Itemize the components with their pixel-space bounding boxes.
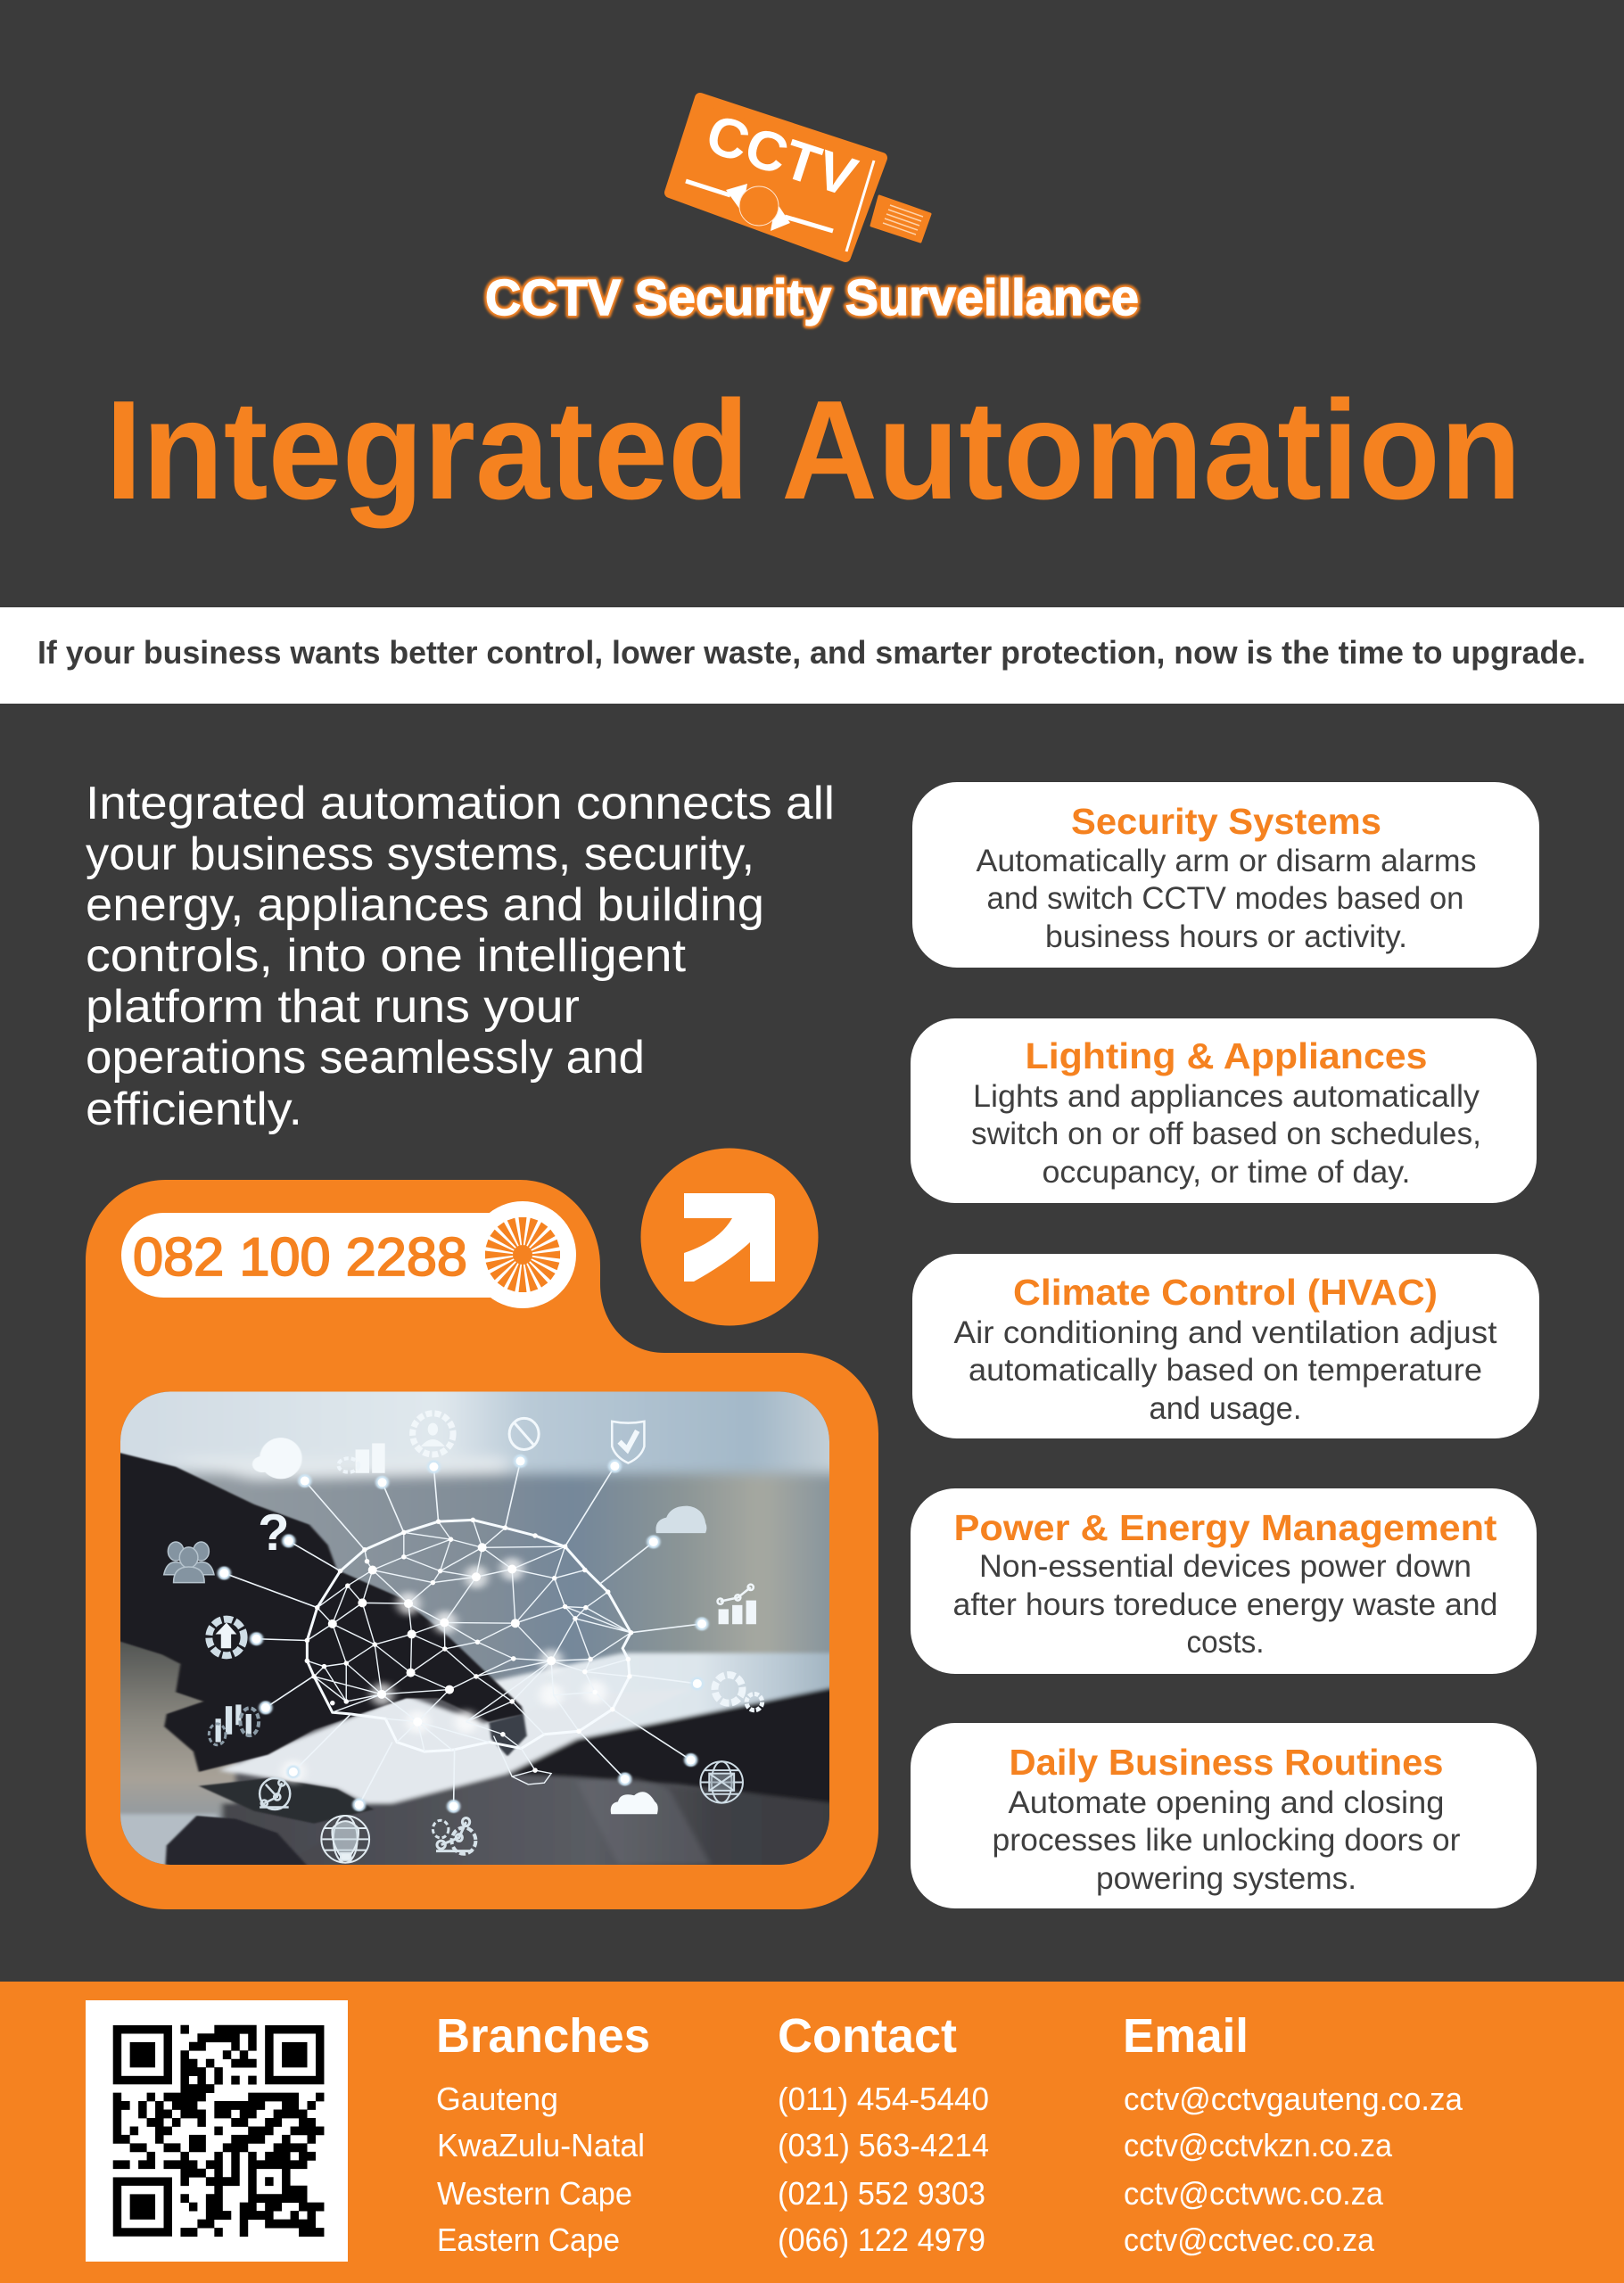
icon: gear person <box>413 1413 453 1455</box>
nodes <box>224 1461 702 1806</box>
card label: CCTV <box>699 103 864 209</box>
card body: and usage. <box>1149 1391 1302 1426</box>
card body: automatically based on temperature <box>969 1353 1482 1388</box>
network glow <box>293 1569 595 1772</box>
card body: after hours toreduce energy waste and <box>952 1587 1498 1622</box>
card heading: Security Systems <box>1071 801 1381 842</box>
footer column: Contact: (021) 552 9303 <box>778 2175 985 2212</box>
phone number pill <box>121 1201 576 1308</box>
footer band <box>0 1982 1624 2283</box>
icon: soft cloud <box>252 1438 302 1479</box>
card heading: Power & Energy Management <box>954 1507 1497 1548</box>
footer column: Email <box>1123 2009 1463 2258</box>
card: Power & Energy Management <box>911 1488 1537 1674</box>
footer column: Contact: (011) 454-5440 <box>778 2081 989 2117</box>
footer column: Branches: Gauteng <box>436 2081 558 2117</box>
card body: and switch CCTV modes based on <box>986 881 1464 916</box>
icon: gears with graph <box>433 1817 475 1854</box>
card body <box>971 1079 1481 1190</box>
icon: globe envelope <box>700 1761 743 1803</box>
logo wordmark: CCTV Security Surveillance <box>485 269 1139 326</box>
panel: orange image frame <box>86 1180 878 1909</box>
card body: business hours or activity. <box>1045 919 1407 954</box>
photo base <box>120 1391 829 1865</box>
brain web <box>307 1520 631 1784</box>
photo: hand touching tablet with network brain <box>120 1391 829 1865</box>
footer column: Contact: (031) 563-4214 <box>778 2127 989 2163</box>
footer column: Contact: (066) 122 4979 <box>778 2221 985 2258</box>
card body: Non-essential devices power down <box>979 1549 1471 1584</box>
card body: processes like unlocking doors or <box>992 1823 1461 1858</box>
card: Security Systems <box>912 782 1539 968</box>
card body: powering systems. <box>1096 1861 1356 1896</box>
card: Lighting & Appliances <box>911 1018 1537 1203</box>
photo background <box>120 1391 829 1682</box>
card heading: Daily Business Routines <box>1010 1742 1443 1783</box>
footer column: Branches: Eastern Cape <box>437 2221 620 2258</box>
icon: globe bulb <box>321 1816 369 1863</box>
icon: prohibited <box>509 1418 539 1449</box>
card heading: Lighting & Appliances <box>1026 1035 1427 1076</box>
card body: switch on or off based on schedules, <box>971 1117 1481 1151</box>
intro paragraph: Integrated automation connects all <box>86 778 835 829</box>
dark lower hand <box>164 1816 323 1883</box>
icon: cloud question <box>655 1506 706 1533</box>
intro paragraph: controls, into one intelligent <box>86 930 687 982</box>
card body: Automatically arm or disarm alarms <box>976 844 1477 878</box>
hand silhouette <box>107 1449 523 1772</box>
dark thumb <box>199 1778 374 1824</box>
card body <box>992 1785 1461 1896</box>
tagline text: If your business wants better control, lower waste, and smarter protection, now is the time to upgrade. <box>37 634 1586 671</box>
icon: network circle <box>260 1778 290 1809</box>
icon: gear arrow <box>209 1620 244 1655</box>
footer column: Branches: Western Cape <box>437 2175 632 2212</box>
card plate and cutlery mark <box>686 181 833 231</box>
brain outline <box>307 1520 631 1751</box>
card body: Air conditioning and ventilation adjust <box>954 1315 1497 1350</box>
icon: gear and bars <box>338 1443 385 1473</box>
second finger <box>489 1714 527 1756</box>
footer column: Branches <box>436 2009 650 2258</box>
column heading: Branches <box>436 2009 650 2063</box>
QR code <box>86 2000 348 2262</box>
column heading: Contact <box>778 2009 957 2063</box>
tagline band <box>0 607 1624 704</box>
icon: shield check <box>612 1422 644 1463</box>
node glows <box>224 1461 702 1806</box>
intro paragraph: your business systems, security, <box>86 828 754 880</box>
icon: cloud white <box>611 1792 658 1814</box>
footer column: Email: cctv@cctvgauteng.co.za <box>1124 2081 1463 2117</box>
logo wordmark: CCTV Security Surveillance <box>485 269 1139 326</box>
footer column: Contact <box>778 2009 989 2258</box>
icon: sunburst <box>485 1217 560 1292</box>
intro paragraph: operations seamlessly and <box>86 1032 645 1084</box>
intro paragraph <box>86 778 835 1135</box>
icon: bar chart <box>718 1585 756 1624</box>
card tab <box>871 196 930 242</box>
card body <box>954 1315 1497 1426</box>
icon: arrow in circle <box>640 1149 819 1325</box>
intro paragraph: platform that runs your <box>86 981 580 1033</box>
card body: costs. <box>1186 1625 1265 1660</box>
card body <box>952 1549 1498 1660</box>
icon: question mark: ? <box>258 1504 289 1562</box>
footer column: Email: cctv@cctvwc.co.za <box>1124 2175 1384 2212</box>
footer column: Email: cctv@cctvkzn.co.za <box>1124 2127 1393 2163</box>
icon: gears right <box>714 1675 763 1710</box>
card body: occupancy, or time of day. <box>1042 1155 1411 1190</box>
card body: Lights and appliances automatically <box>973 1079 1480 1114</box>
card heading: Climate Control (HVAC) <box>1013 1272 1438 1313</box>
card body <box>976 844 1477 954</box>
phone number: 082 100 2288 <box>133 1227 467 1287</box>
card body: Automate opening and closing <box>1008 1785 1445 1820</box>
logo: CCTV card <box>670 98 930 257</box>
intro paragraph: energy, appliances and building <box>86 879 764 931</box>
icon: people <box>164 1542 214 1583</box>
card divider <box>846 161 874 251</box>
footer column: Branches: KwaZulu-Natal <box>437 2127 645 2163</box>
card body <box>670 98 882 257</box>
spokes <box>224 1461 702 1806</box>
intro paragraph: efficiently. <box>86 1084 302 1135</box>
card: Daily Business Routines <box>911 1723 1537 1908</box>
column heading: Email <box>1123 2009 1249 2063</box>
title: Integrated Automation <box>105 372 1521 529</box>
icon: candlestick gear <box>209 1704 259 1745</box>
card: Climate Control (HVAC) <box>912 1254 1539 1438</box>
footer column: Email: cctv@cctvec.co.za <box>1124 2221 1375 2258</box>
